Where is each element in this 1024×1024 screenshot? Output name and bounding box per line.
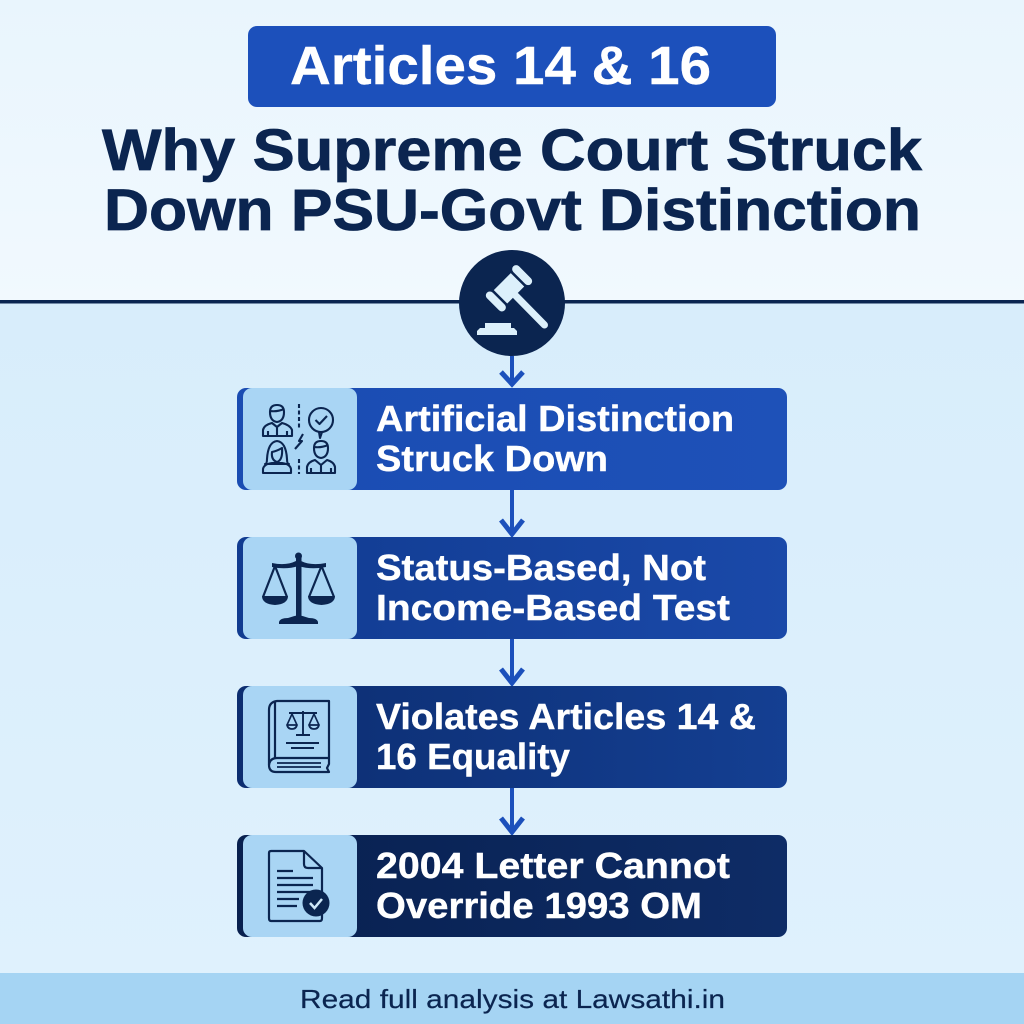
step 3 text (376, 696, 756, 777)
heading: Down PSU-Govt Distinction (104, 178, 921, 243)
panel: step 1 (237, 388, 787, 490)
step 2 text: Income-Based Test (376, 587, 730, 628)
arrow: step 3 to step 4 (501, 788, 523, 832)
heading (102, 118, 923, 243)
arrow: step 2 to step 3 (501, 639, 523, 683)
footer: Read full analysis at Lawsathi.in (300, 984, 725, 1014)
title badge (248, 26, 776, 107)
panel: step 2 (237, 537, 787, 639)
step 4 text (376, 845, 730, 926)
step 4 text: Override 1993 OM (376, 885, 702, 926)
step 1 text: Struck Down (376, 438, 608, 479)
arrow: gavel to step 1 (501, 356, 523, 385)
icon: gavel (459, 250, 565, 356)
title badge: Articles 14 & 16 (290, 36, 711, 96)
panel: step 4 (237, 835, 787, 937)
step 3 text: 16 Equality (376, 736, 570, 777)
step 1 text: Artificial Distinction (376, 398, 734, 439)
icon tile: people divided (243, 388, 357, 490)
heading: Why Supreme Court Struck (102, 118, 923, 183)
step 1 text (376, 398, 734, 479)
step 4 text: 2004 Letter Cannot (376, 845, 730, 886)
panel: step 3 (237, 686, 787, 788)
header divider (0, 300, 1024, 304)
icon tile: scales (243, 537, 357, 639)
step 3 text: Violates Articles 14 & (376, 696, 756, 737)
arrow: step 1 to step 2 (501, 490, 523, 534)
icon tile: document with check (243, 835, 357, 937)
footer (0, 973, 1024, 1024)
icon tile: law book (243, 686, 357, 788)
step 2 text (376, 547, 730, 628)
step 2 text: Status-Based, Not (376, 547, 706, 588)
